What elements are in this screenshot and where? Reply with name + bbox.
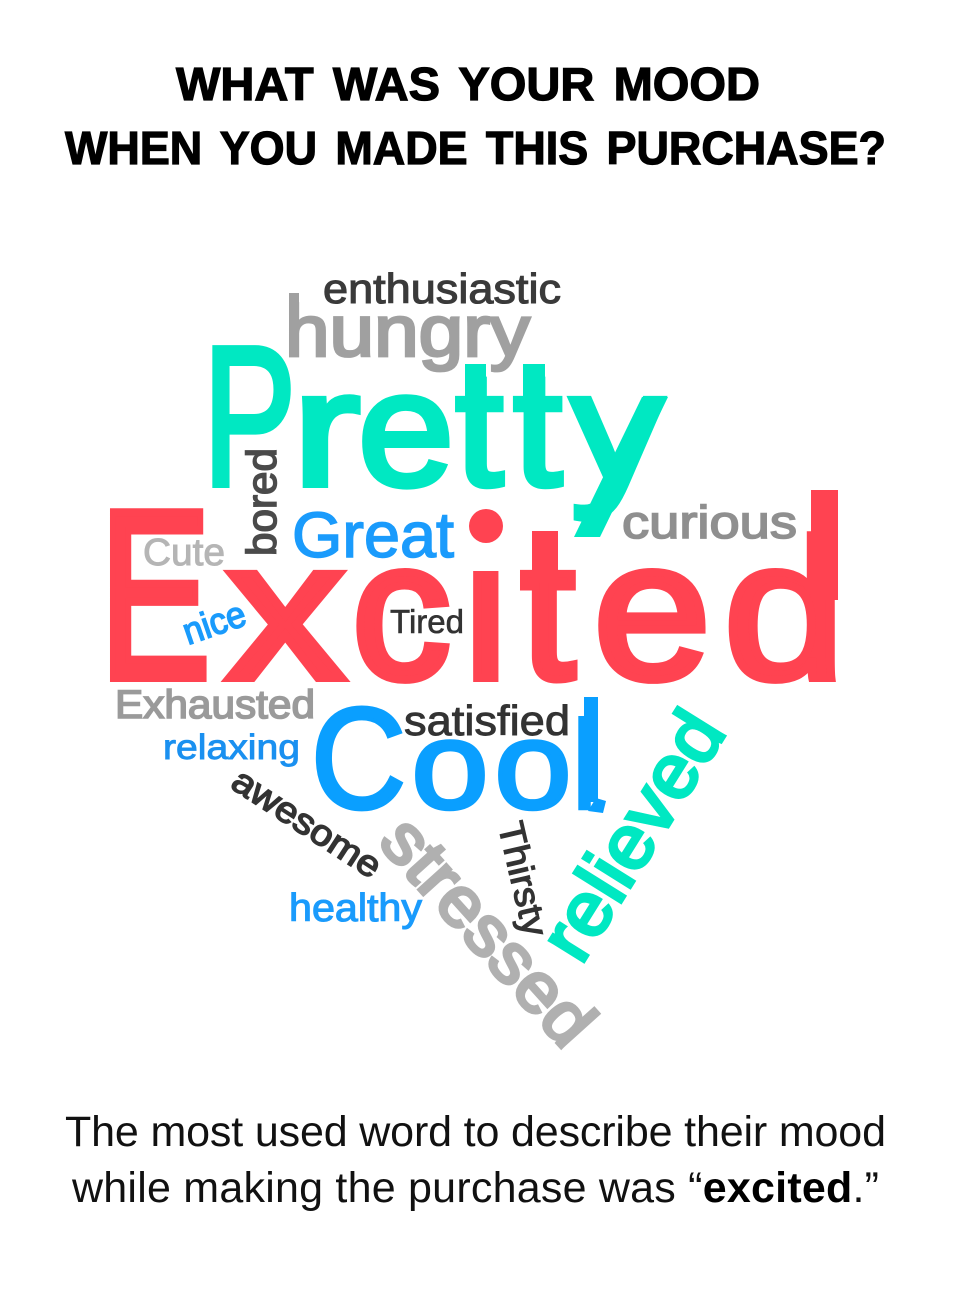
- word: Excited: [99, 461, 845, 730]
- word cloud: [99, 265, 845, 1061]
- word: Pretty: y: [571, 337, 664, 520]
- word: Thirsty: Thirsty: [490, 818, 556, 940]
- word: Pretty: t: [514, 337, 562, 520]
- word: curious: curious: [622, 496, 797, 548]
- word: Great: Great: [292, 499, 454, 571]
- word: Pretty: e: [358, 337, 454, 520]
- word: Pretty: [203, 306, 668, 537]
- word: Excited: i: [464, 500, 508, 720]
- word: Cool: [311, 678, 606, 839]
- word: Excited: t: [521, 500, 575, 720]
- word: healthy: healthy: [289, 887, 423, 930]
- word: awesome: awesome: [225, 759, 390, 886]
- word: Pretty: t: [456, 337, 503, 520]
- word: Excited: E: [99, 461, 211, 730]
- title: WHEN YOU MADE THIS PURCHASE?: [65, 122, 886, 174]
- caption: while making the purchase was “excited.”: [71, 1164, 879, 1212]
- word: Excited: d: [724, 500, 845, 720]
- word: stressed: stressed: [366, 801, 611, 1061]
- word: bored: bored: [238, 448, 285, 556]
- caption: The most used word to describe their mood: [65, 1108, 886, 1156]
- title: WHAT WAS YOUR MOOD: [176, 58, 760, 110]
- word: Cute: Cute: [143, 532, 225, 574]
- title: [65, 58, 886, 174]
- word: enthusiastic: enthusiastic: [323, 265, 561, 312]
- word: Excited: x: [227, 500, 344, 720]
- word: Cool: o: [494, 697, 572, 835]
- word: Pretty: r: [292, 337, 360, 520]
- word: relieved: relieved: [523, 696, 742, 975]
- word: Excited: c: [352, 500, 450, 720]
- word: Tired: Tired: [390, 603, 464, 640]
- word: Cool: C: [311, 678, 406, 839]
- caption: [65, 1108, 886, 1212]
- word: Cool: l: [573, 697, 596, 835]
- word: Exhausted: Exhausted: [115, 683, 315, 727]
- word: Pretty: P: [203, 306, 296, 528]
- word: relaxing: relaxing: [163, 728, 300, 767]
- word: Cool: o: [412, 697, 488, 835]
- word: nice: nice: [177, 593, 251, 653]
- word: hungry: hungry: [285, 292, 530, 372]
- word: Excited: e: [594, 500, 711, 720]
- word: satisfied: satisfied: [404, 697, 570, 744]
